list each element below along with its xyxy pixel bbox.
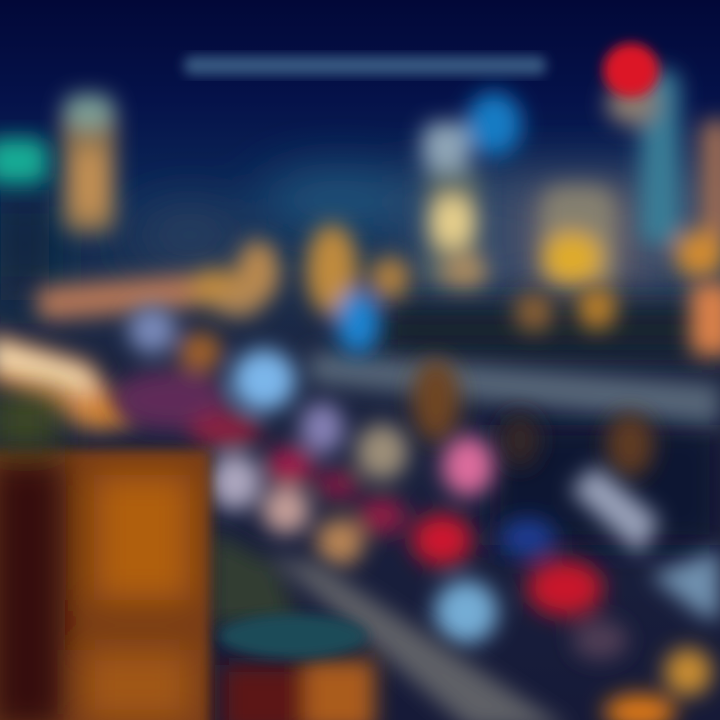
traffic lights	[112, 306, 720, 660]
building details	[0, 395, 190, 720]
elevated road	[310, 352, 720, 425]
teal awning	[219, 614, 367, 658]
bottom right orange lights	[604, 648, 712, 720]
dark road band	[380, 305, 720, 545]
lower red and orange base	[222, 660, 375, 720]
right towers and signs	[422, 70, 720, 292]
left streak of headlights	[0, 332, 135, 430]
red balloon light	[603, 43, 659, 97]
background skyline haze	[0, 170, 720, 300]
roadside barrier	[210, 530, 570, 720]
left tower	[62, 94, 116, 234]
teal sign	[0, 138, 48, 184]
title strip	[184, 56, 546, 75]
foreground brown building	[0, 450, 210, 720]
warm mid lights	[35, 224, 720, 477]
